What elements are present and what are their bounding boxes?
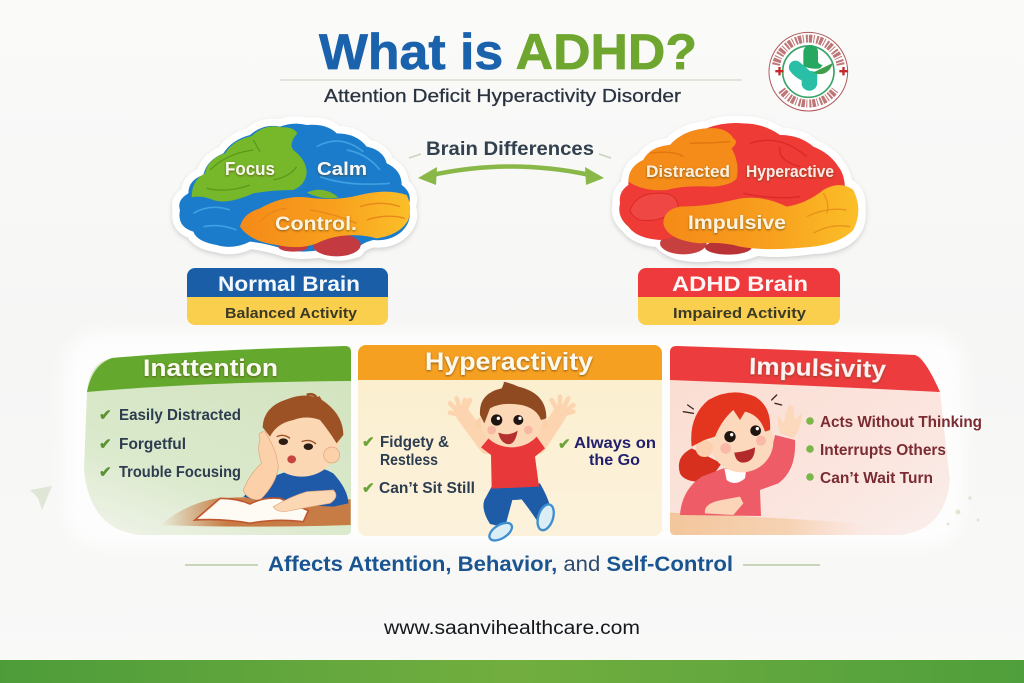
checklist: hyperactivity right: Always on bbox=[574, 435, 656, 452]
tagline: Affects Attention, Behavior, and Self-Control bbox=[268, 553, 733, 576]
website: www.saanvihealthcare.com bbox=[383, 618, 640, 639]
icon: excited girl raising hand bbox=[670, 392, 872, 535]
sub: frontal lobe bbox=[192, 126, 307, 201]
checklist: hyperactivity left bbox=[362, 434, 475, 497]
panel: inattention bbox=[84, 346, 351, 535]
checklist: inattention: Trouble Focusing bbox=[119, 464, 241, 481]
normal brain badge: Balanced Activity bbox=[225, 305, 358, 322]
sub: frontal lobe bbox=[628, 128, 738, 190]
list: impulsivity: Can’t Wait Turn bbox=[820, 470, 933, 487]
checklist: inattention: Easily Distracted bbox=[119, 407, 241, 424]
label: distracted: Distracted bbox=[646, 162, 730, 181]
label: control: Control. bbox=[275, 214, 357, 235]
label: calm: Calm bbox=[317, 159, 367, 179]
heading: brain differences: Brain Differences bbox=[426, 139, 594, 160]
footer bar bbox=[0, 660, 1024, 683]
heading: inattention: Inattention bbox=[143, 355, 278, 382]
normal brain illustration bbox=[179, 124, 410, 256]
label: hyperactive: Hyperactive bbox=[746, 162, 834, 181]
panel: hyperactivity bbox=[358, 345, 662, 544]
decorative confetti dots bbox=[946, 496, 980, 526]
checklist: inattention: Forgetful bbox=[119, 436, 186, 453]
adhd brain badge: Impaired Activity bbox=[673, 305, 807, 322]
icon: jumping boy bbox=[450, 382, 573, 544]
heading: impulsivity: Impulsivity bbox=[749, 353, 887, 384]
header: hyperactivity bbox=[358, 345, 662, 380]
checklist: hyperactivity left: ✔ bbox=[362, 480, 375, 497]
label: impulsive: Impulsive bbox=[688, 213, 786, 234]
panel: impulsivity bbox=[670, 346, 982, 535]
heading: hyperactivity: Hyperactivity bbox=[425, 348, 593, 376]
checklist: hyperactivity right: ✔ bbox=[558, 436, 571, 453]
subtitle: Attention Deficit Hyperactivity Disorder bbox=[324, 86, 681, 106]
normal brain badge: Normal Brain bbox=[218, 273, 360, 296]
icon: bored boy reading bbox=[160, 394, 351, 527]
header: inattention bbox=[87, 346, 351, 392]
header: impulsivity bbox=[670, 346, 940, 392]
label: focus: Focus bbox=[225, 159, 275, 179]
checklist: inattention: ✔ bbox=[99, 464, 112, 481]
logo bbox=[769, 32, 848, 111]
title: What is ADHD? bbox=[319, 24, 697, 80]
normal brain badge bbox=[187, 268, 388, 325]
arrow: two-way comparison bbox=[418, 166, 604, 185]
list: impulsivity bbox=[806, 414, 982, 487]
checklist: inattention bbox=[99, 407, 241, 481]
checklist: hyperactivity left: Fidgety & bbox=[380, 434, 449, 451]
checklist: hyperactivity right bbox=[558, 435, 656, 469]
checklist: hyperactivity left: Can’t Sit Still bbox=[379, 480, 475, 497]
list: impulsivity: Acts Without Thinking bbox=[820, 414, 982, 431]
checklist: hyperactivity left: ✔ bbox=[362, 434, 375, 451]
checklist: inattention: ✔ bbox=[99, 407, 112, 424]
decorative paper plane bbox=[30, 486, 52, 510]
adhd brain badge bbox=[638, 268, 840, 325]
checklist: hyperactivity right: the Go bbox=[589, 452, 640, 469]
checklist: inattention: ✔ bbox=[99, 436, 112, 453]
adhd brain illustration bbox=[619, 123, 858, 255]
adhd brain badge: ADHD Brain bbox=[672, 273, 808, 296]
list: impulsivity: Interrupts Others bbox=[820, 442, 946, 459]
checklist: hyperactivity left: Restless bbox=[380, 452, 438, 469]
